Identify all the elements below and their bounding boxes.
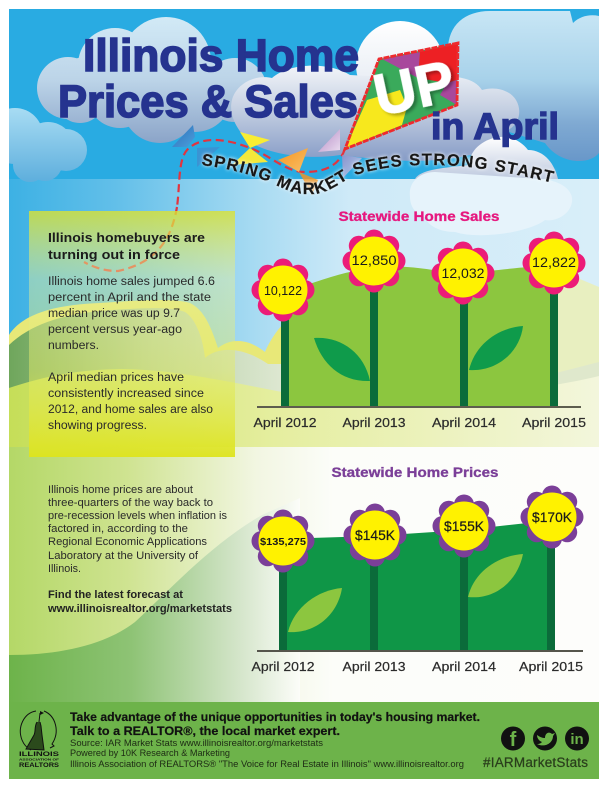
heading: Illinois homebuyers: Illinois homebuyers are: [48, 230, 205, 245]
price area: [279, 520, 555, 651]
axis labels: April 2015: [519, 659, 583, 674]
text block: sales summary: percent versus year-ago: [48, 324, 182, 336]
text block: home prices context: Illinois.: [48, 563, 81, 575]
baseline: [257, 406, 581, 408]
icon: Illinois Association of Realtors logo: ASSOCIATION OF: [19, 758, 59, 762]
panel: footer: [9, 702, 599, 779]
text block: home prices context: Laboratory at the University of: [48, 550, 199, 562]
title: Prices & Sales: [58, 76, 358, 127]
axis labels: April 2015: [522, 415, 586, 430]
flower 2015: $170K: [532, 509, 573, 525]
text block: sales summary: percent in April and the state: [48, 292, 211, 304]
flower 2014: [432, 242, 494, 304]
text block: sales summary: Illinois home sales jumped 6.6: [48, 276, 215, 288]
icon: twitter: [533, 726, 557, 750]
chart title: Statewide Home Prices: [332, 465, 498, 480]
chart: statewide home prices: [252, 465, 584, 674]
text block: sales summary: consistently increased since: [48, 388, 204, 400]
lower background: [9, 447, 599, 703]
hills: [9, 275, 599, 454]
leaves: [288, 554, 523, 632]
text block: home prices context: three-quarters of the way back to: [48, 497, 213, 509]
footer credits: [70, 738, 464, 769]
flower 2014: $155K: [444, 518, 485, 534]
text block: home prices context: factored in, according to the: [48, 523, 188, 535]
flower 2013: $145K: [355, 527, 396, 543]
flower 2015: [520, 486, 584, 548]
middle background: [9, 179, 599, 352]
hashtag: #IARMarketStats: [483, 755, 588, 770]
text block: sales summary: showing progress.: [48, 420, 147, 432]
kite word UP: UP: [368, 48, 460, 129]
pennants on kite string: [172, 125, 362, 195]
heading: Illinois homebuyers: [48, 230, 205, 262]
axis labels: [252, 659, 583, 674]
text block: sales summary: median price was up 9.7: [48, 308, 180, 320]
flower 2012: $135,275: [260, 536, 306, 548]
flower 2013: [342, 230, 406, 292]
stems: [279, 535, 555, 651]
baseline: [257, 650, 583, 652]
chart title: Statewide Home Sales: [338, 209, 500, 224]
flower 2015: 12,822: [532, 255, 576, 270]
footer credits: Powered by 10K Research & Marketing: [70, 748, 230, 758]
flower 2012: 10,122: [264, 283, 302, 298]
title: [58, 30, 559, 147]
leaves: [314, 326, 523, 381]
hill area: [281, 266, 558, 407]
text block: home prices context: Regional Economic Applications: [48, 536, 207, 548]
footer credits: Illinois Association of REALTORS® "The Voice for Real Estate in Illinois" www.illinoisrealtor.org: [70, 759, 464, 769]
kite string: [177, 140, 345, 207]
text block: home prices context: Illinois home prices are about: [48, 484, 194, 496]
text block: home prices context: pre-recession levels when inflation is: [48, 510, 227, 522]
kite: [345, 43, 460, 149]
text block: home prices context: [48, 484, 227, 575]
flower 2013: 12,850: [352, 253, 396, 268]
footer message: Take advantage of the unique opportunities in today's housing market.: [70, 710, 480, 724]
text box panel: [29, 207, 235, 457]
forecast link text: www.illinoisrealtor.org/marketstats: [47, 603, 232, 615]
clouds: [0, 11, 599, 235]
footer credits: Source: IAR Market Stats www.illinoisrealtor.org/marketstats: [70, 738, 324, 748]
footer message: [70, 710, 480, 738]
icon: Illinois Association of Realtors logo: REALTORS: [19, 762, 60, 769]
flower 2013: [344, 504, 406, 566]
title: Illinois Home: [83, 30, 359, 81]
icon: linkedin: in: [570, 731, 584, 748]
axis labels: [254, 415, 586, 430]
flower 2014: [432, 494, 496, 558]
icon: Illinois Association of Realtors logo: ILLINOIS: [19, 751, 60, 758]
sky band: [9, 9, 599, 179]
axis labels: April 2013: [342, 659, 406, 674]
footer message: Talk to a REALTOR®, the local market expert.: [70, 724, 340, 738]
title: in April: [431, 106, 559, 147]
icon: facebook: [501, 726, 525, 751]
heading: Illinois homebuyers: turning out in force: [48, 247, 180, 262]
icon: linkedin: [565, 726, 589, 750]
icon: Illinois Association of Realtors logo: [19, 711, 60, 769]
subtitle: SPRING MARKET SEES STRONG START: [200, 151, 557, 196]
stems: [281, 285, 558, 407]
text block: sales summary: numbers.: [48, 340, 99, 352]
axis labels: April 2012: [254, 415, 316, 430]
flower 2015: [522, 232, 586, 294]
icon: facebook: f: [510, 729, 517, 751]
text block: sales summary: April median prices have: [48, 372, 184, 384]
forecast link text: [47, 589, 232, 615]
forecast link text: Find the latest forecast at: [48, 589, 183, 601]
axis labels: April 2012: [252, 659, 314, 674]
axis labels: April 2014: [432, 659, 496, 674]
text block: sales summary: [48, 276, 215, 432]
flower 2012: [252, 510, 314, 572]
axis labels: April 2013: [342, 415, 406, 430]
flower 2014: 12,032: [442, 266, 484, 281]
flower 2012: [252, 258, 314, 322]
chart: statewide home sales: [252, 209, 586, 430]
axis labels: April 2014: [432, 415, 496, 430]
text block: sales summary: 2012, and home sales are also: [48, 404, 213, 416]
